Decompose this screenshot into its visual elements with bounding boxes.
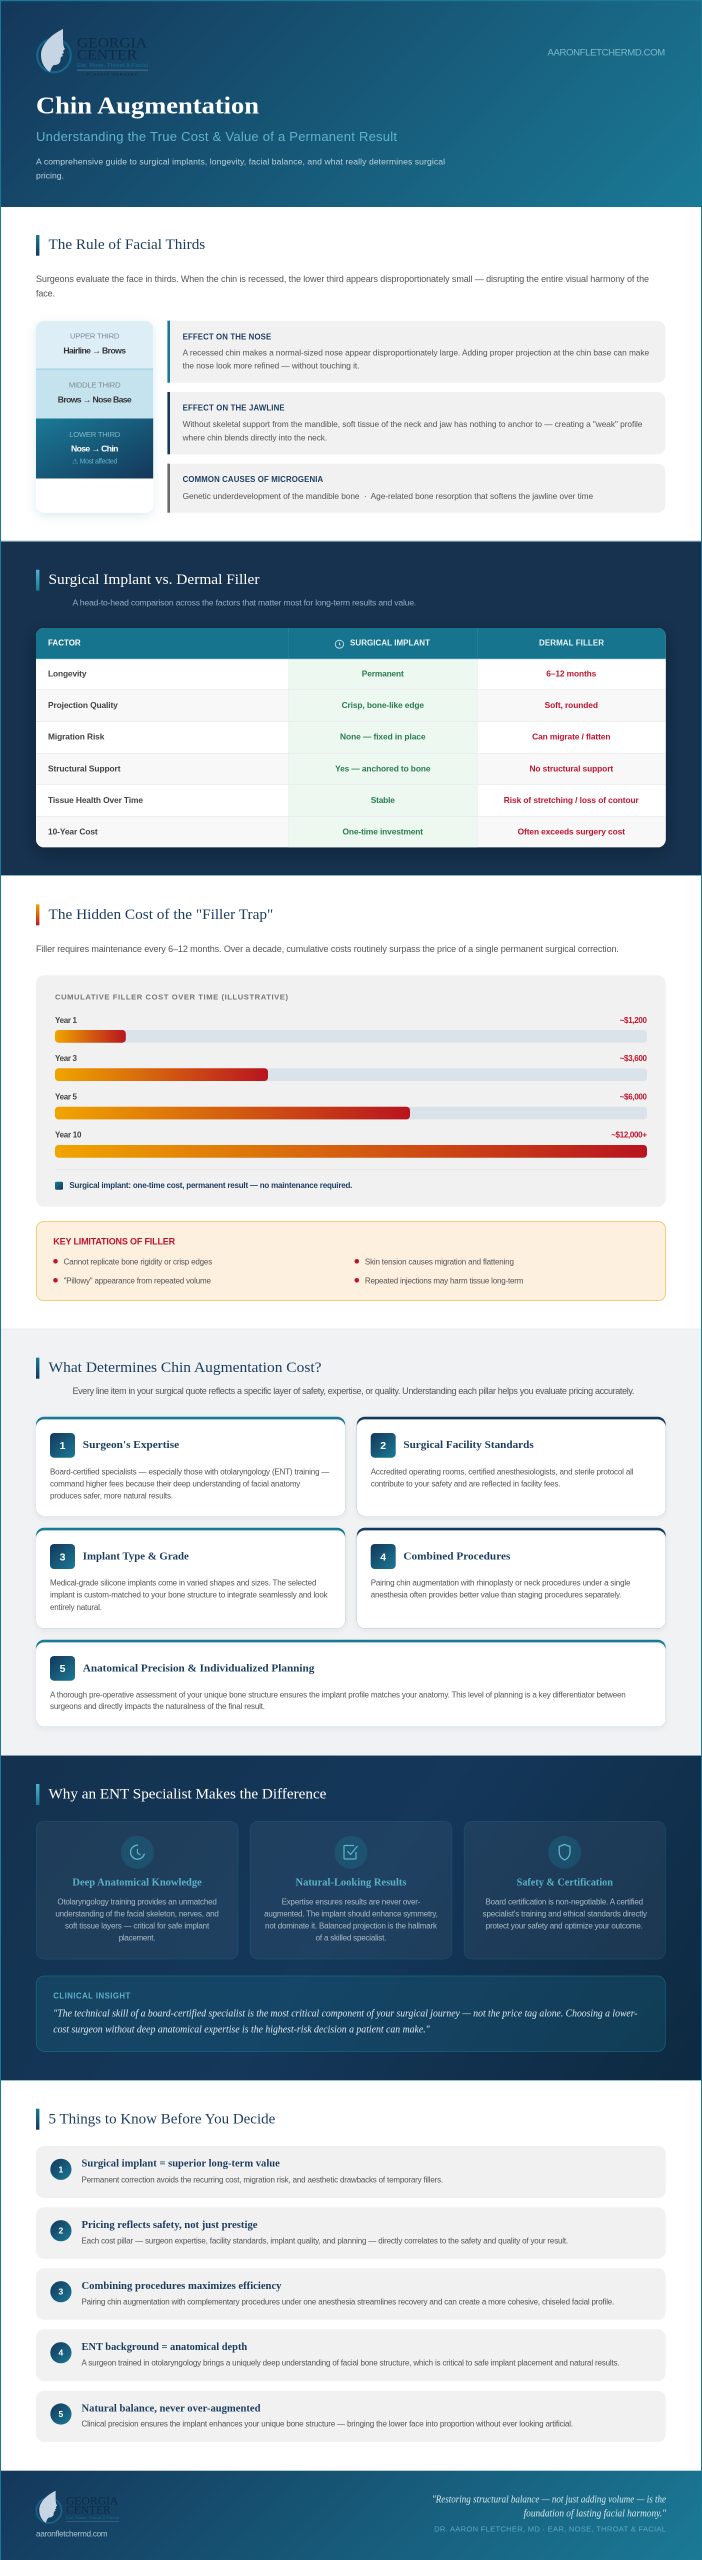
card: safety and certification: Safety & Certification bbox=[517, 1878, 613, 1889]
bar: year 3: Year 3 bbox=[55, 1054, 78, 1063]
card 1: surgeon's expertise: Board-certified specialists — especially those with otolaryngology (ENT) training — bbox=[50, 1467, 329, 1476]
table row: projection quality: Crisp, bone-like edge bbox=[342, 700, 424, 710]
bar: year 10: Year 10 bbox=[55, 1131, 82, 1140]
intro description bbox=[36, 156, 445, 181]
header banner bbox=[0, 0, 702, 207]
card: common causes of microgenia: COMMON CAUSES OF MICROGENIA bbox=[183, 475, 324, 484]
table row: 10-year cost: 10-Year Cost bbox=[48, 826, 98, 836]
section: rule of facial thirds bbox=[36, 235, 665, 513]
card: effect on the nose: A recessed chin makes a normal-sized nose appear disproportionately large. Adding proper projection at the chin base can make bbox=[183, 347, 649, 357]
item 1: 1 bbox=[59, 2164, 64, 2174]
card: safety and certification: Board certification is non-negotiable. A certified bbox=[486, 1897, 643, 1906]
section: why an ENT specialist bbox=[0, 1755, 702, 2081]
card: natural-looking results: augmented. The implant should enhance symmetry, bbox=[264, 1909, 438, 1918]
table row: structural support bbox=[48, 763, 613, 773]
facial thirds diagram bbox=[36, 321, 153, 513]
card 3: implant type and grade: Implant Type & Grade bbox=[83, 1551, 189, 1562]
facial thirds diagram: MIDDLE THIRD bbox=[69, 381, 121, 390]
bar: year 3: ~$3,600 bbox=[620, 1054, 648, 1063]
card 5: anatomical precision bbox=[36, 1640, 666, 1727]
card: natural-looking results: not dominate it. Balanced projection is the hallmark bbox=[265, 1921, 438, 1930]
card 4: combined procedures: anesthesia often provides better value than staging procedures separately. bbox=[371, 1591, 621, 1600]
callout: clinical insight: CLINICAL INSIGHT bbox=[53, 1991, 131, 2000]
item 2: Pricing reflects safety, not just prestige bbox=[82, 2220, 258, 2231]
item 3: Pairing chin augmentation with complementary procedures under one anesthesia streamlines recovery and can create a more cohesive, chiseled facial profile. bbox=[82, 2297, 614, 2306]
table row: longevity: Permanent bbox=[362, 668, 404, 678]
footer quote: foundation of lasting facial harmony." bbox=[524, 2509, 667, 2520]
bar: year 1: Year 1 bbox=[55, 1016, 78, 1025]
item 5: Clinical precision ensures the implant enhances your unique bone structure — bringing the lower face into proportion without ever looking artificial. bbox=[82, 2420, 573, 2429]
table row: migration risk bbox=[48, 732, 610, 742]
intro text: face. bbox=[36, 289, 55, 299]
heading accent bar bbox=[36, 1358, 39, 1379]
callout: clinical insight bbox=[36, 1976, 665, 2051]
card: common causes of microgenia: Genetic underdevelopment of the mandible bone · Age-related bone resorption that softens the jawline over time bbox=[183, 491, 593, 501]
table header: SURGICAL IMPLANT bbox=[350, 639, 430, 648]
item 4 bbox=[36, 2329, 666, 2381]
card 2: surgical facility standards: 2 bbox=[380, 1440, 386, 1452]
logo: Georgia Center: PLASTIC SURGERY bbox=[87, 72, 138, 76]
bar: year 3 bbox=[55, 1054, 648, 1081]
icon: shield bbox=[548, 1836, 581, 1869]
card: effect on the nose: EFFECT ON THE NOSE bbox=[183, 332, 271, 341]
table row: tissue health bbox=[48, 795, 640, 805]
card 2: surgical facility standards bbox=[357, 1417, 666, 1516]
callout: clinical insight: "The technical skill of a board-certified specialist is the most critical component of your surgical journey — not the price tag alone. Choosing a lower- bbox=[53, 2008, 638, 2020]
footer logo: GEORGIA bbox=[66, 2495, 118, 2507]
section: what determines cost bbox=[0, 1329, 702, 1756]
card: safety and certification: protect your safety and optimize your outcome. bbox=[486, 1921, 643, 1930]
card 2: surgical facility standards: contribute to your safety and are reflected in facility fees. bbox=[371, 1480, 560, 1489]
legend: surgical implant: Surgical implant: one-time cost, permanent result — no maintenance required. bbox=[69, 1181, 352, 1190]
card: deep anatomical knowledge: soft tissue layers — critical for safe implant bbox=[65, 1921, 210, 1930]
logo: Georgia Center bbox=[37, 29, 148, 76]
facial thirds diagram: LOWER THIRD bbox=[69, 430, 121, 439]
card 1: surgeon's expertise: Surgeon's Expertise bbox=[83, 1440, 179, 1451]
table row: 10-year cost bbox=[48, 826, 625, 836]
heading accent bar bbox=[36, 235, 39, 256]
subheading: A head-to-head comparison across the factors that matter most for long-term results and value. bbox=[72, 598, 416, 608]
heading: 5 Things to Know Before You Decide bbox=[48, 2111, 276, 2127]
card 3: implant type and grade: entirely natural. bbox=[50, 1603, 102, 1612]
item 3: 3 bbox=[59, 2287, 64, 2297]
item 5 bbox=[36, 2391, 666, 2442]
section: filler trap bbox=[36, 904, 666, 1301]
callout: key limitations of filler: Repeated injections may harm tissue long-term bbox=[365, 1276, 524, 1285]
bar: year 1 bbox=[55, 1016, 648, 1043]
table row: migration risk: Migration Risk bbox=[48, 732, 105, 742]
intro text: Surgeons evaluate the face in thirds. When the chin is recessed, the lower third appears disproportionately small — disrupting the entire visual harmony of the bbox=[36, 274, 649, 284]
table header bbox=[48, 639, 604, 648]
card 3: implant type and grade: implant is custom-matched to your bone structure to integrate seamlessly and look bbox=[50, 1591, 329, 1600]
card 4: combined procedures: 4 bbox=[380, 1551, 386, 1563]
intro description: pricing. bbox=[36, 171, 64, 181]
card 4: combined procedures: Combined Procedures bbox=[403, 1551, 510, 1562]
card 2: surgical facility standards: Accredited operating rooms, certified anesthesiologists, and sterile protocol all bbox=[371, 1467, 634, 1476]
intro description: A comprehensive guide to surgical implants, longevity, facial balance, and what really determines surgical bbox=[36, 156, 445, 166]
item 4: ENT background = anatomical depth bbox=[82, 2342, 247, 2353]
item 1: Permanent correction avoids the recurring cost, migration risk, and aesthetic drawbacks of temporary fillers. bbox=[82, 2175, 443, 2184]
heading: Surgical Implant vs. Dermal Filler bbox=[48, 572, 260, 588]
logo: Georgia Center: CENTER bbox=[77, 48, 137, 64]
table row: longevity bbox=[48, 668, 597, 678]
table header: DERMAL FILLER bbox=[539, 639, 604, 648]
table row: 10-year cost: One-time investment bbox=[342, 826, 423, 836]
card 3: implant type and grade: Medical-grade silicone implants come in varied shapes and sizes. The selected bbox=[50, 1578, 316, 1587]
callout: clinical insight: cost surgeon without deep anatomical expertise is the highest-risk decision a patient can make." bbox=[53, 2023, 430, 2035]
table header: FACTOR bbox=[48, 639, 81, 648]
item 2: 2 bbox=[59, 2226, 64, 2236]
logo: Georgia Center: Ear, Nose, Throat & Facial bbox=[77, 63, 148, 69]
chart title: CUMULATIVE FILLER COST OVER TIME (ILLUSTRATIVE) bbox=[55, 993, 288, 1002]
card: effect on the jawline bbox=[167, 392, 665, 454]
item 2: Each cost pillar — surgeon expertise, facility standards, implant quality, and planning — directly correlates to the safety and quality of your result. bbox=[82, 2236, 568, 2245]
table row: projection quality bbox=[48, 700, 598, 710]
title: Chin Augmentation bbox=[36, 92, 259, 120]
bar: year 1: ~$1,200 bbox=[620, 1016, 648, 1025]
logo: Georgia Center: GEORGIA bbox=[77, 36, 147, 52]
card: natural-looking results: Expertise ensures results are never over- bbox=[282, 1897, 421, 1906]
card 4: combined procedures bbox=[357, 1528, 666, 1628]
card 2: surgical facility standards: Surgical Facility Standards bbox=[403, 1440, 534, 1451]
card: deep anatomical knowledge: Otolaryngology training provides an unmatched bbox=[57, 1897, 217, 1906]
card 1: surgeon's expertise: command higher fees because their deep understanding of facial anatomy bbox=[50, 1480, 300, 1489]
chart panel: cumulative filler cost bbox=[36, 975, 666, 1207]
comparison table bbox=[36, 628, 666, 848]
item 4: 4 bbox=[59, 2348, 64, 2358]
card: deep anatomical knowledge: placement. bbox=[119, 1934, 155, 1943]
callout: key limitations of filler: KEY LIMITATIONS OF FILLER bbox=[53, 1237, 176, 1247]
item 5: 5 bbox=[59, 2409, 64, 2419]
table row: migration risk: Can migrate / flatten bbox=[532, 732, 610, 742]
item 3 bbox=[36, 2268, 666, 2320]
bar: year 5: Year 5 bbox=[55, 1093, 78, 1102]
item 3: Combining procedures maximizes efficiency bbox=[82, 2281, 282, 2292]
icon: knowledge dial bbox=[121, 1836, 154, 1869]
icon: check square bbox=[334, 1836, 368, 1869]
item 1: Surgical implant = superior long-term value bbox=[82, 2159, 280, 2170]
subheading: Every line item in your surgical quote reflects a specific layer of safety, expertise, or quality. Understanding each pillar helps you evaluate pricing accurately. bbox=[72, 1386, 634, 1396]
table row: tissue health: Tissue Health Over Time bbox=[48, 795, 143, 805]
card: safety and certification bbox=[464, 1821, 665, 1959]
intro text bbox=[36, 274, 649, 299]
facial thirds diagram: UPPER THIRD bbox=[70, 332, 120, 341]
card: deep anatomical knowledge: Deep Anatomical Knowledge bbox=[72, 1878, 202, 1889]
table row: structural support: Structural Support bbox=[48, 763, 121, 773]
heading accent bar bbox=[36, 2109, 39, 2130]
heading: The Rule of Facial Thirds bbox=[48, 237, 205, 253]
table row: migration risk: None — fixed in place bbox=[340, 732, 426, 742]
card: effect on the nose: the nose look more refined — without touching it. bbox=[183, 360, 359, 370]
callout: key limitations of filler: "Pillowy" appearance from repeated volume bbox=[64, 1276, 211, 1285]
item 2 bbox=[36, 2207, 666, 2259]
table row: tissue health: Risk of stretching / loss of contour bbox=[504, 795, 640, 805]
footer quote bbox=[432, 2495, 667, 2520]
heading: What Determines Chin Augmentation Cost? bbox=[48, 1360, 322, 1376]
card: deep anatomical knowledge: understanding of the facial skeleton, nerves, and bbox=[55, 1909, 219, 1918]
heading accent bar bbox=[36, 570, 39, 591]
card 1: surgeon's expertise: produces safer, more natural results. bbox=[50, 1491, 173, 1500]
item 4: A surgeon trained in otolaryngology brings a uniquely deep understanding of facial bone structure, which is critical to safe implant placement and natural results. bbox=[82, 2359, 620, 2368]
bar: year 5: ~$6,000 bbox=[620, 1093, 648, 1102]
card 3: implant type and grade: 3 bbox=[60, 1551, 66, 1563]
card: common causes of microgenia bbox=[167, 464, 665, 513]
section: 5 things to know bbox=[36, 2109, 666, 2442]
bar: year 10: ~$12,000+ bbox=[611, 1131, 647, 1140]
heading accent bar bbox=[36, 1784, 39, 1805]
card: natural-looking results bbox=[250, 1821, 452, 1959]
bar: year 10 bbox=[55, 1131, 647, 1158]
card 5: anatomical precision: A thorough pre-operative assessment of your unique bone structure ensures the implant profile matches your anatomy. This level of planning is a key differentiator between bbox=[50, 1690, 626, 1699]
table row: projection quality: Soft, rounded bbox=[545, 700, 598, 710]
callout: key limitations of filler: Skin tension causes migration and flattening bbox=[365, 1258, 514, 1267]
table row: longevity: 6–12 months bbox=[546, 668, 597, 678]
card 4: combined procedures: Pairing chin augmentation with rhinoplasty or neck procedures under a single bbox=[371, 1578, 631, 1587]
card 1: surgeon's expertise: 1 bbox=[60, 1440, 66, 1452]
card: deep anatomical knowledge bbox=[36, 1821, 238, 1959]
table row: longevity: Longevity bbox=[48, 668, 87, 678]
heading: Why an ENT Specialist Makes the Difference bbox=[48, 1786, 327, 1802]
footer website: aaronfletchermd.com bbox=[36, 2530, 108, 2539]
card: effect on the jawline: where chin blends directly into the neck. bbox=[182, 432, 327, 442]
card 1: surgeon's expertise bbox=[36, 1417, 345, 1516]
card 5: anatomical precision: 5 bbox=[60, 1663, 66, 1675]
card: safety and certification: specialist's training and ethical standards directly bbox=[483, 1909, 647, 1918]
callout: key limitations of filler bbox=[36, 1222, 665, 1301]
table row: tissue health: Stable bbox=[371, 795, 395, 805]
card: effect on the nose bbox=[167, 321, 665, 383]
icon: clock badge bbox=[335, 640, 344, 648]
card: effect on the jawline: EFFECT ON THE JAWLINE bbox=[183, 404, 285, 413]
facial thirds diagram: Nose → Chin bbox=[71, 444, 118, 454]
intro text: Filler requires maintenance every 6–12 months. Over a decade, cumulative costs routinely surpass the price of a single permanent surgical correction. bbox=[36, 944, 619, 954]
item 5: Natural balance, never over-augmented bbox=[82, 2403, 261, 2414]
website: AARONFLETCHERMD.COM bbox=[548, 48, 665, 58]
table row: 10-year cost: Often exceeds surgery cost bbox=[518, 826, 625, 836]
heading accent bar bbox=[36, 904, 39, 925]
footer logo: CENTER bbox=[66, 2504, 111, 2516]
facial thirds diagram: ⚠ Most affected bbox=[72, 458, 117, 466]
heading: The Hidden Cost of the "Filler Trap" bbox=[48, 907, 273, 923]
table row: projection quality: Projection Quality bbox=[48, 700, 118, 710]
callout: key limitations of filler: Cannot replicate bone rigidity or crisp edges bbox=[64, 1258, 212, 1267]
section: implant vs filler comparison bbox=[0, 541, 702, 876]
bar: year 5 bbox=[55, 1093, 648, 1119]
item 1 bbox=[36, 2146, 666, 2198]
card: natural-looking results: of a skilled specialist. bbox=[316, 1934, 386, 1943]
facial thirds diagram: Brows → Nose Base bbox=[58, 395, 132, 405]
card 3: implant type and grade bbox=[36, 1528, 345, 1628]
footer attribution: DR. AARON FLETCHER, MD · EAR, NOSE, THROAT & FACIAL bbox=[434, 2525, 666, 2534]
card: effect on the jawline: Without skeletal support from the mandible, soft tissue of the neck and jaw has nothing to anchor to — creating a "weak" profile bbox=[183, 419, 643, 429]
facial thirds diagram: Hairline → Brows bbox=[63, 345, 126, 355]
table row: structural support: No structural support bbox=[529, 763, 613, 773]
footer logo: Ear, Nose, Throat & Facial bbox=[66, 2516, 119, 2520]
card: natural-looking results: Natural-Looking Results bbox=[296, 1878, 406, 1889]
card 5: anatomical precision: Anatomical Precision & Individualized Planning bbox=[83, 1663, 315, 1674]
footer quote: "Restoring structural balance — not just adding volume — is the bbox=[432, 2495, 666, 2506]
footer logo bbox=[36, 2491, 119, 2523]
card 5: anatomical precision: surgeons and directly impacts the naturalness of the final result. bbox=[50, 1702, 265, 1711]
table row: structural support: Yes — anchored to bone bbox=[335, 763, 431, 773]
subtitle: Understanding the True Cost & Value of a Permanent Result bbox=[36, 129, 397, 144]
footer bbox=[0, 2471, 702, 2560]
